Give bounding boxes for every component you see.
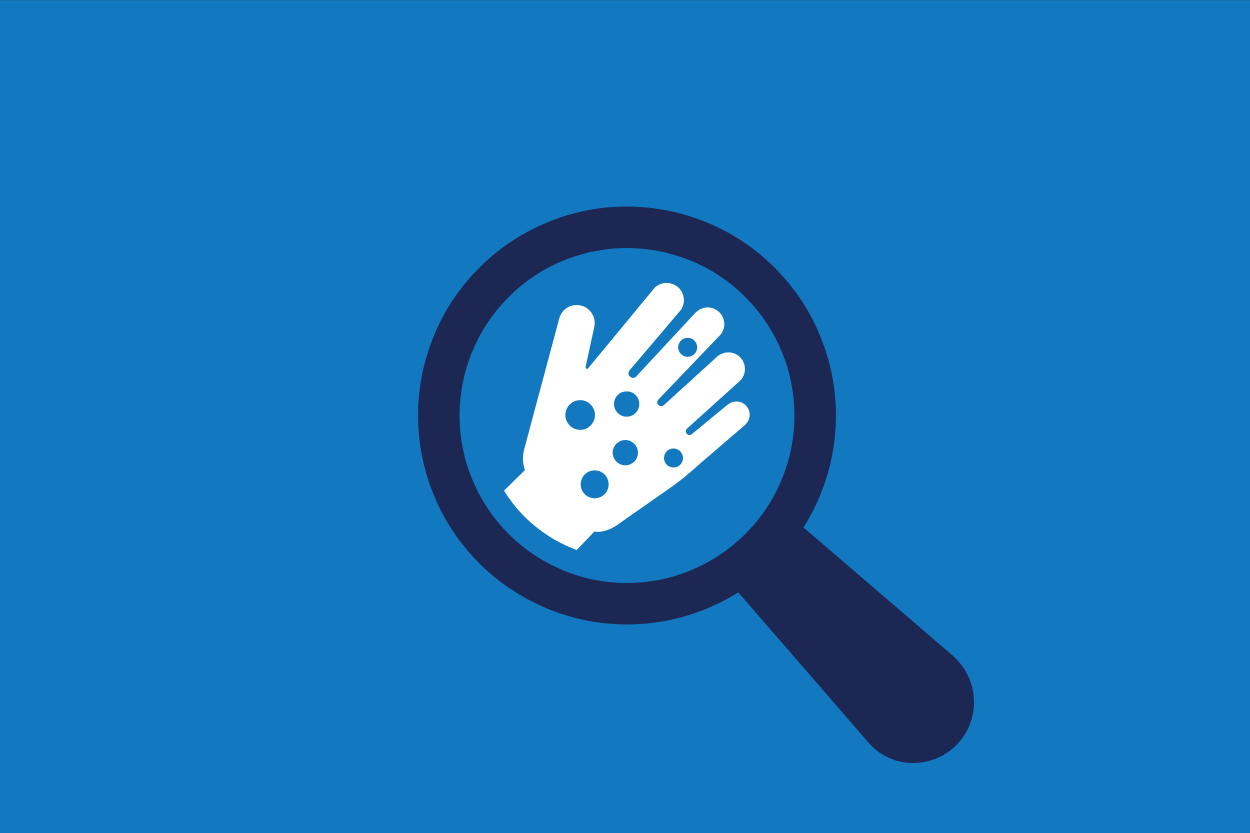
spot: on finger: [678, 338, 697, 357]
spot: centre: [613, 440, 638, 465]
spot: upper middle: [614, 391, 639, 417]
spot: lower right: [664, 448, 683, 467]
spot: lower left: [581, 470, 609, 498]
icon: magnifying glass handle: [738, 527, 974, 763]
spot: large left: [565, 400, 595, 430]
icon: magnifying glass ring: [439, 227, 815, 604]
icon: hand with spots: [504, 283, 750, 550]
